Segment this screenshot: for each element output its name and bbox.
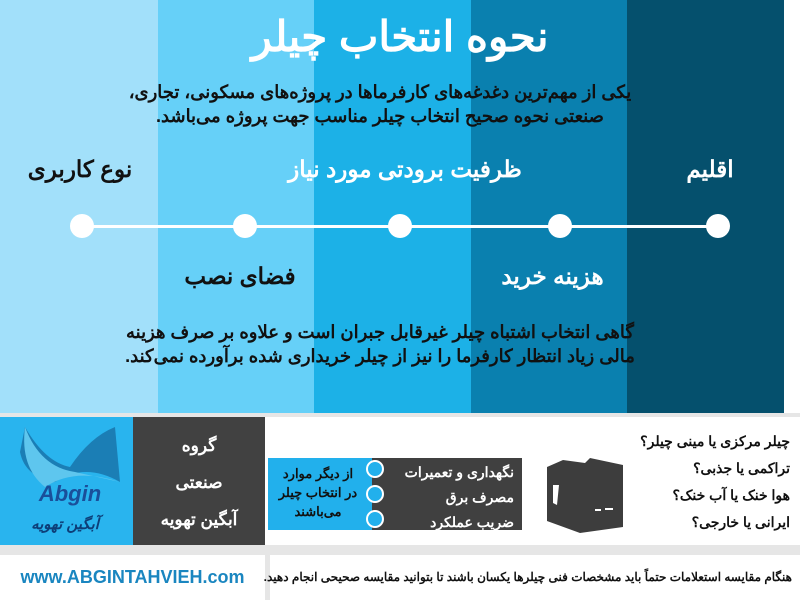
website url: www.ABGINTAHVIEH.com	[20, 567, 244, 587]
background stripes	[0, 0, 800, 413]
questions list: تراکمی یا جذبی؟	[693, 460, 790, 476]
warning text: گاهی انتخاب اشتباه چیلر غیرقابل جبران است و علاوه بر صرف هزینه	[126, 322, 634, 342]
website url	[0, 555, 265, 600]
label: climate: اقلیم	[686, 156, 734, 182]
label: purchase cost: هزینه خرید	[501, 263, 604, 289]
other factors box: مصرف برق	[446, 489, 514, 505]
company name panel	[133, 417, 265, 545]
logo panel: آبگین تهویه	[31, 516, 99, 533]
icon: chiller	[547, 458, 623, 533]
questions list: چیلر مرکزی یا مینی چیلر؟	[640, 433, 790, 449]
other factors box: نگهداری و تعمیرات	[405, 464, 514, 480]
footer note: هنگام مقایسه استعلامات حتماً باید مشخصات فنی چیلرها یکسان باشند تا بتوانید مقایسه صحیحی انجام دهید.	[264, 570, 792, 584]
timeline	[70, 214, 730, 238]
label: usage type: نوع کاربری	[28, 156, 132, 182]
questions list: ایرانی یا خارجی؟	[692, 514, 790, 530]
warning text: مالی زیاد انتظار کارفرما را نیز از چیلر خریداری شده برآورده نمی‌کند.	[125, 346, 635, 366]
other factors box: از دیگر موارد	[283, 466, 353, 481]
other factors box: ضریب عملکرد	[430, 514, 514, 530]
title: نحوه انتخاب چیلر	[251, 13, 549, 60]
company name panel: صنعتی	[175, 473, 223, 492]
other factors box	[268, 458, 522, 530]
intro text	[129, 82, 631, 127]
logo panel	[0, 417, 133, 545]
company name panel: گروه	[182, 436, 216, 455]
intro text: یکی از مهم‌ترین دغدغه‌های کارفرماها در پروژه‌های مسکونی، تجاری،	[129, 82, 631, 102]
warning text	[125, 322, 635, 367]
intro text: صنعتی نحوه صحیح انتخاب چیلر مناسب جهت پروژه می‌باشد.	[156, 106, 604, 126]
logo panel: Abgin	[39, 481, 101, 506]
bottom white area	[265, 417, 800, 545]
label: capacity: ظرفیت برودتی مورد نیاز	[288, 156, 522, 182]
footer note	[270, 555, 800, 600]
label: installation space: فضای نصب	[184, 263, 296, 289]
other factors box: در انتخاب چیلر	[279, 485, 357, 500]
questions list: هوا خنک یا آب خنک؟	[672, 487, 790, 503]
other factors box: می‌باشند	[294, 504, 342, 519]
company name panel: آبگین تهویه	[161, 510, 237, 529]
questions list	[640, 433, 790, 531]
